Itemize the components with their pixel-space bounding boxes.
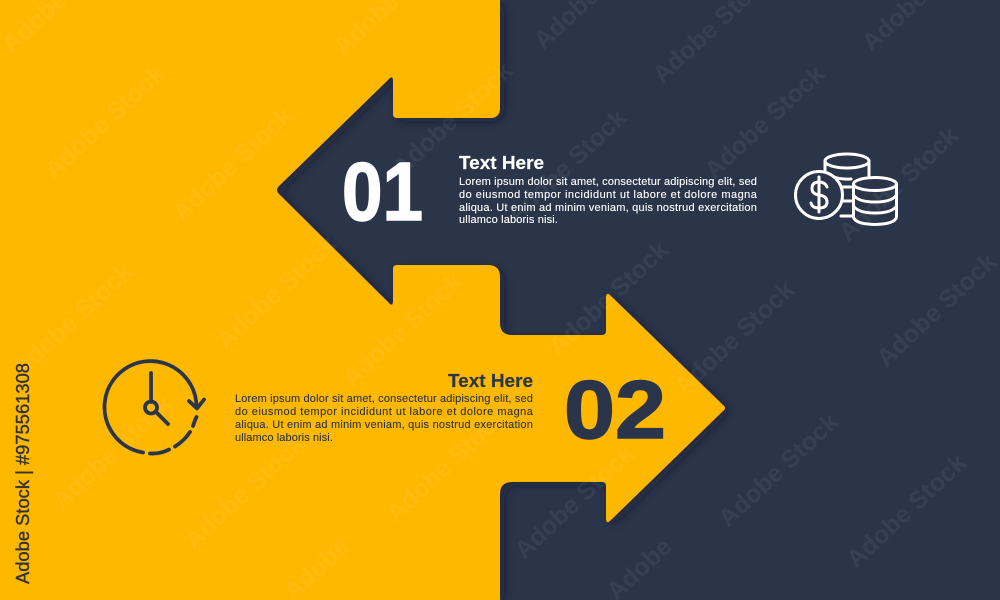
body: step 1: do eiusmod tempor incididunt ut labore et dolore magna — [459, 189, 758, 201]
watermark: Adobe Stock pattern: Adobe Stock — [167, 102, 298, 226]
watermark: Adobe Stock pattern: Adobe Stock — [7, 258, 138, 382]
text block: step 1 — [459, 152, 758, 226]
icon: coin stacks with dollar — [796, 154, 896, 224]
number 02: 02 — [564, 363, 666, 456]
watermark: Adobe Stock pattern: Adobe Stock — [833, 122, 964, 246]
body: step 2 — [235, 393, 534, 444]
watermark: Adobe Stock pattern: Adobe Stock — [337, 268, 468, 392]
watermark: Adobe Stock pattern: Adobe Stock — [841, 449, 972, 573]
body: step 1: Lorem ipsum dolor sit amet, consectetur adipiscing elit, sed — [459, 176, 757, 188]
body: step 1 — [459, 176, 758, 226]
watermark: Adobe Stock pattern: Adobe Stock — [543, 236, 674, 360]
watermark: Adobe Stock pattern: Adobe Stock — [381, 403, 512, 527]
body: step 2: Lorem ipsum dolor sit amet, consectetur adipiscing elit, sed — [235, 393, 533, 405]
heading: step 1: Text Here — [459, 152, 544, 173]
watermark: Adobe Stock pattern: Adobe Stock — [179, 430, 310, 554]
stock id label: Adobe Stock | #975561308 — [13, 363, 33, 584]
text block: step 2 — [235, 370, 534, 444]
watermark: Adobe Stock pattern: Adobe Stock — [509, 440, 640, 564]
watermark: Adobe Stock pattern: Adobe Stock — [713, 408, 844, 532]
watermark: Adobe Stock pattern: Adobe Stock — [39, 60, 170, 184]
body: step 2: aliqua. Ut enim ad minim veniam, quis nostrud exercitation — [235, 419, 533, 431]
body: step 1: ullamco laboris nisi. — [459, 214, 558, 226]
watermark: Adobe Stock pattern: Adobe Stock — [387, 57, 518, 181]
body: step 2: do eiusmod tempor incididunt ut labore et dolore magna — [235, 406, 534, 418]
watermark: Adobe Stock pattern: Adobe Stock — [669, 276, 800, 400]
heading: step 2: Text Here — [448, 370, 533, 391]
number 01: 01 — [342, 145, 423, 238]
watermark: Adobe Stock pattern: Adobe Stock — [871, 248, 1000, 372]
body: step 1: aliqua. Ut enim ad minim veniam, quis nostrud exercitation — [459, 202, 757, 214]
watermark: Adobe Stock pattern: Adobe Stock — [501, 104, 632, 228]
panel: yellow shape with interlocking arrows — [0, 0, 725, 600]
icon: clock with circular arrow — [105, 361, 204, 454]
watermark: Adobe Stock pattern: Adobe Stock — [47, 390, 178, 514]
watermark: Adobe Stock pattern: Adobe Stock — [699, 60, 830, 184]
watermark: Adobe Stock pattern: Adobe Stock — [211, 230, 342, 354]
body: step 2: ullamco laboris nisi. — [235, 432, 333, 444]
